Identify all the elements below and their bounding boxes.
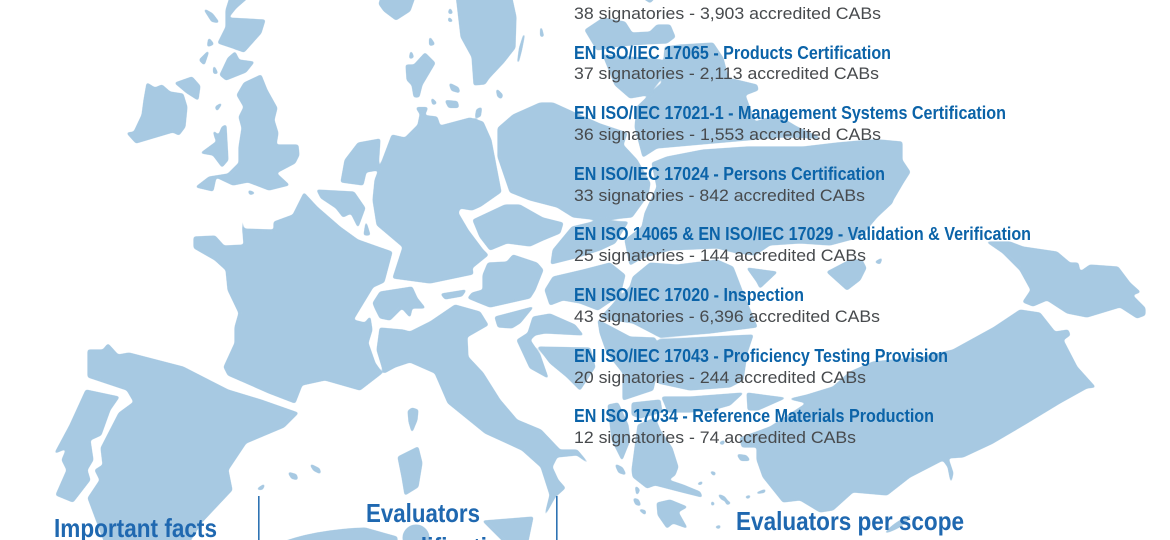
Caucasus — [987, 242, 1145, 318]
scope: validation and verification: EN ISO 14065 & EN ISO/IEC 17029 - Validation & Verification — [574, 224, 1031, 244]
scope: proficiency testing: 20 signatories - 244 accredited CABs — [574, 369, 866, 387]
Ukraine — [625, 140, 910, 265]
scope: calibration counts: 38 signatories - 3,903 accredited CABs — [574, 5, 881, 23]
heading: evaluators qualification: Evaluators — [366, 498, 480, 528]
Czech Republic — [473, 205, 563, 250]
Cyprus — [885, 515, 911, 533]
heading: evaluators qualification — [366, 498, 515, 540]
scope: inspection — [574, 285, 880, 326]
Belgium — [317, 190, 365, 227]
Corsica — [408, 408, 418, 432]
Turkey — [740, 310, 1095, 512]
Serbia — [598, 320, 660, 400]
column divider right — [556, 496, 558, 540]
Greek Thrace — [662, 393, 743, 412]
Ireland — [127, 77, 200, 143]
scope: inspection: 43 signatories - 6,396 accredited CABs — [574, 308, 880, 326]
Luxembourg — [364, 222, 370, 235]
Bosnia — [538, 347, 595, 390]
Portugal — [55, 390, 119, 502]
Lithuania — [603, 55, 662, 98]
Sicily — [483, 517, 533, 540]
Slovenia — [495, 307, 533, 328]
Norway fragment — [379, 0, 416, 20]
North Macedonia — [632, 400, 662, 418]
scope: reference materials: EN ISO 17034 - Reference Materials Production — [574, 406, 934, 426]
Poland — [498, 103, 650, 220]
Sardinia — [398, 447, 422, 495]
scope: management systems certification — [574, 103, 1006, 144]
Germany — [373, 115, 501, 283]
Netherlands — [341, 139, 380, 185]
North Sea and Baltic islands — [200, 0, 656, 194]
heading: evaluators per scope: Evaluators per scope — [736, 506, 964, 536]
France — [194, 193, 392, 403]
Switzerland — [373, 287, 425, 320]
Austria — [468, 255, 543, 307]
Bulgaria — [658, 335, 753, 390]
Croatia — [517, 314, 583, 378]
North Africa coast — [273, 525, 429, 540]
Crimea — [827, 258, 882, 290]
Spain — [88, 344, 298, 540]
Liechtenstein sliver — [441, 290, 466, 299]
scope: products certification: EN ISO/IEC 17065 - Products Certification — [574, 43, 891, 63]
Greece — [632, 418, 702, 497]
Moldova area — [747, 268, 777, 288]
scope: validation and verification: 25 signatories - 144 accredited CABs — [574, 247, 866, 265]
Scotland — [218, 0, 265, 80]
scope: proficiency testing — [574, 346, 948, 387]
Aegean islands — [616, 441, 765, 528]
Hungary — [545, 263, 625, 310]
Slovakia — [551, 221, 628, 264]
column divider left — [258, 496, 260, 540]
Western British piece — [201, 125, 228, 167]
scope: inspection: EN ISO/IEC 17020 - Inspection — [574, 285, 804, 305]
Italy — [377, 305, 588, 515]
scope: validation and verification — [574, 224, 1031, 265]
Romania — [600, 260, 757, 337]
scope: products certification: 37 signatories - 2,113 accredited CABs — [574, 65, 879, 83]
Peloponnese — [657, 500, 687, 528]
Balearic islands — [258, 465, 320, 489]
Belarus — [635, 43, 820, 157]
scope: proficiency testing: EN ISO/IEC 17043 - Proficiency Testing Provision — [574, 346, 948, 366]
Albania — [608, 403, 630, 460]
accreditation scope list — [574, 5, 1031, 447]
Sweden — [456, 0, 516, 85]
scope: persons certification — [574, 164, 885, 205]
scope: persons certification: EN ISO/IEC 17024 - Persons Certification — [574, 164, 885, 184]
scope: management systems certification: EN ISO/IEC 17021-1 - Management Systems Certification — [574, 103, 1006, 123]
European Turkey — [747, 393, 785, 410]
Estonia and Latvia — [585, 18, 675, 50]
Denmark — [406, 53, 435, 97]
scope: reference materials: 12 signatories - 74 accredited CABs — [574, 429, 856, 447]
scope: management systems certification: 36 signatories - 1,553 accredited CABs — [574, 126, 881, 144]
scope: reference materials — [574, 406, 934, 447]
scope: persons certification: 33 signatories - 842 accredited CABs — [574, 187, 865, 205]
scope: products certification — [574, 43, 891, 83]
England — [196, 75, 299, 191]
